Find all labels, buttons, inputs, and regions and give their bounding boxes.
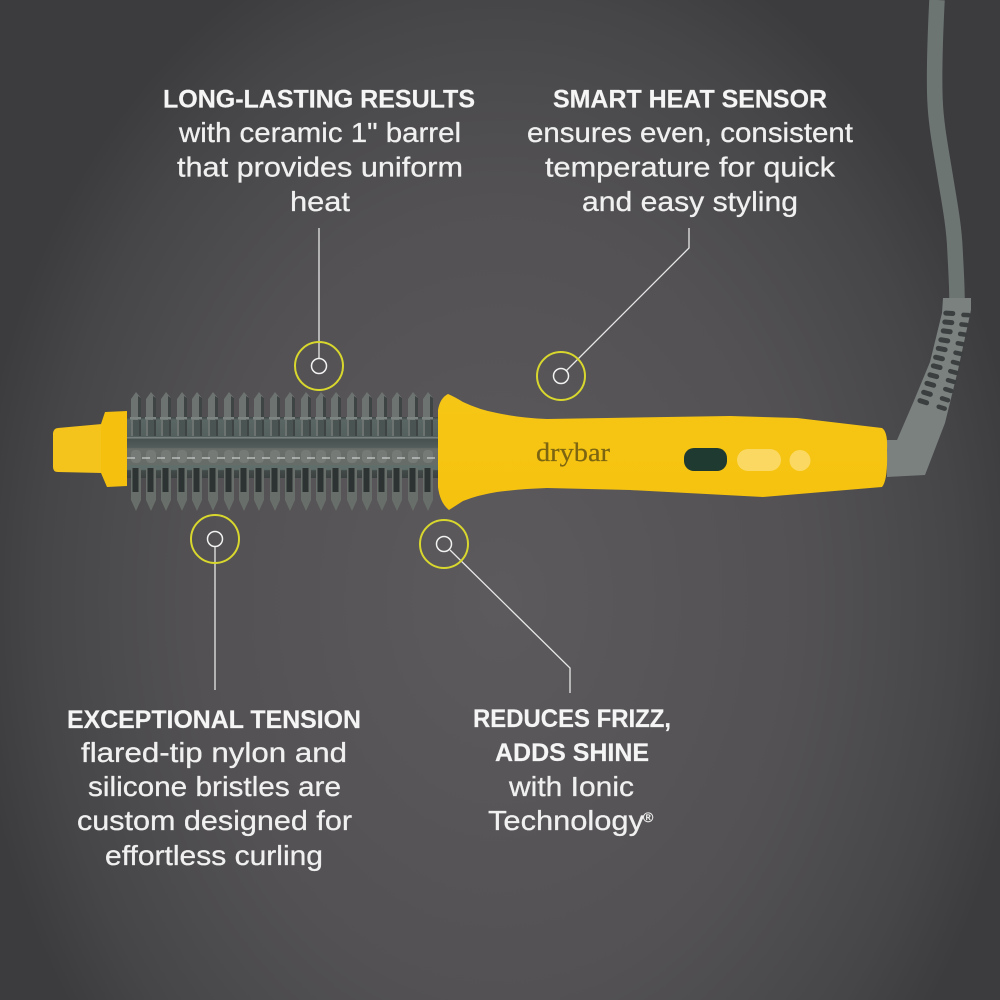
heading and text: ADDS SHINE [495,739,649,767]
heading and text: REDUCES FRIZZ, [473,705,671,733]
heading and text: with ceramic 1" barrel [178,117,461,148]
heading and text: ensures even, consistent [527,117,853,148]
heading and text [527,86,853,217]
heading and text: SMART HEAT SENSOR [553,86,827,114]
callout: smart heat sensor [527,86,853,400]
callout: long-lasting results [163,86,475,390]
heading and text: LONG-LASTING RESULTS [163,86,475,114]
heading and text: temperature for quick [545,152,836,182]
leader line and marker [537,228,689,400]
display [684,448,727,471]
heading and text: silicone bristles are [88,771,341,802]
product: heated curling brush [53,0,971,511]
heading and text [163,86,475,217]
heading and text [67,706,361,871]
leader line and marker [420,520,570,693]
callout: exceptional tension [67,515,361,871]
callout: reduces frizz, adds shine [420,520,671,836]
heading and text: heat [290,186,350,217]
power cord [935,0,957,300]
heading and text: that provides uniform [177,152,463,182]
heading and text: ® [643,809,654,825]
heading and text: effortless curling [105,840,323,871]
barrel [125,417,441,478]
heading and text [473,705,671,836]
handle [438,394,887,510]
round button [790,450,810,471]
drybar logo: drybar [536,438,610,467]
heading and text: and easy styling [582,186,798,217]
strain relief with vents [887,298,971,477]
barrel tip and collar [53,411,127,487]
heading and text: with Ionic [508,771,634,802]
heading and text: custom designed for [77,805,352,836]
leader line and marker [295,228,343,390]
heading and text: flared-tip nylon and [81,737,347,768]
leader line and marker [191,515,239,690]
button [737,449,781,471]
heading and text: EXCEPTIONAL TENSION [67,706,361,734]
bristles [127,392,438,511]
heading and text: Technology [488,805,644,836]
